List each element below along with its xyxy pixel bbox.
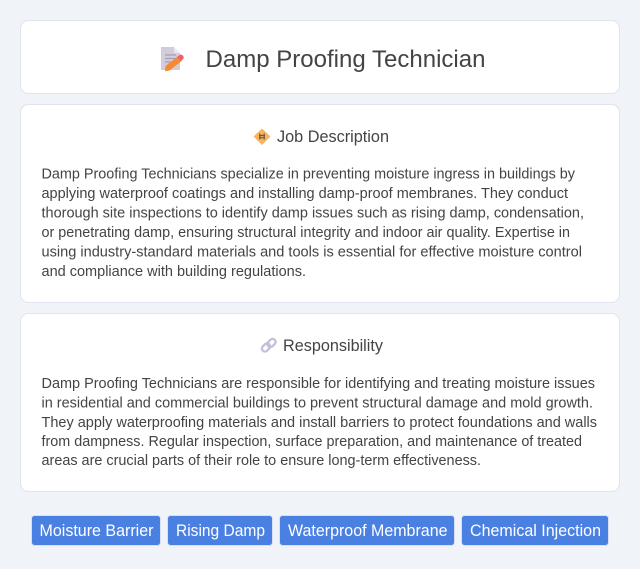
tag: waterproof membrane: Waterproof Membrane	[288, 522, 448, 540]
text: responsibility body: Damp Proofing Technicians are responsible for identifying and treating moisture issues	[42, 376, 595, 392]
text: responsibility body	[42, 376, 597, 469]
text: job description body: or penetrating damp, ensuring structural integrity and indoor air quality. Expertise in	[42, 225, 570, 241]
text: job description body	[42, 166, 584, 280]
text: responsibility body: in residential and commercial buildings to prevent structural damage and mold growth.	[42, 396, 593, 412]
title: Damp Proofing Technician	[206, 46, 486, 73]
tag: moisture barrier	[32, 516, 160, 546]
text: responsibility body: They apply waterproofing materials and install barriers to protect foundations and walls	[42, 415, 597, 431]
text: job description body: thorough site inspections to identify damp issues such as rising damp, condensation,	[42, 206, 584, 222]
tag: chemical injection	[462, 516, 608, 546]
tag: moisture barrier: Moisture Barrier	[40, 522, 154, 540]
tag: rising damp: Rising Damp	[176, 522, 265, 540]
icon: orange diamond	[254, 128, 270, 145]
text: responsibility body: from dampness. Regular inspection, surface preparation, and maintenance of treated	[42, 434, 582, 450]
text: job description body: using industry-standard materials and tools is essential for effective moisture control	[42, 244, 582, 260]
tag: chemical injection: Chemical Injection	[470, 522, 601, 540]
icon: chain link	[261, 338, 277, 353]
heading: job description: Job Description	[277, 128, 389, 146]
text: job description body: Damp Proofing Technicians specialize in preventing moisture ingress in buildings by	[42, 166, 576, 182]
panel: job description	[20, 104, 620, 302]
tag: rising damp	[168, 516, 272, 546]
text: job description body: and compliance with building regulations.	[42, 264, 306, 280]
tag: waterproof membrane	[280, 516, 454, 546]
panel: page header	[20, 20, 620, 94]
icon: document with pencil	[161, 47, 184, 71]
panel: responsibility	[20, 314, 620, 492]
heading: responsibility: Responsibility	[283, 337, 384, 355]
text: responsibility body: areas are crucial parts of their role to ensure long-term effectiveness.	[42, 453, 481, 469]
text: job description body: applying waterproof coatings and installing damp-proof membranes. They conduct	[42, 186, 568, 202]
